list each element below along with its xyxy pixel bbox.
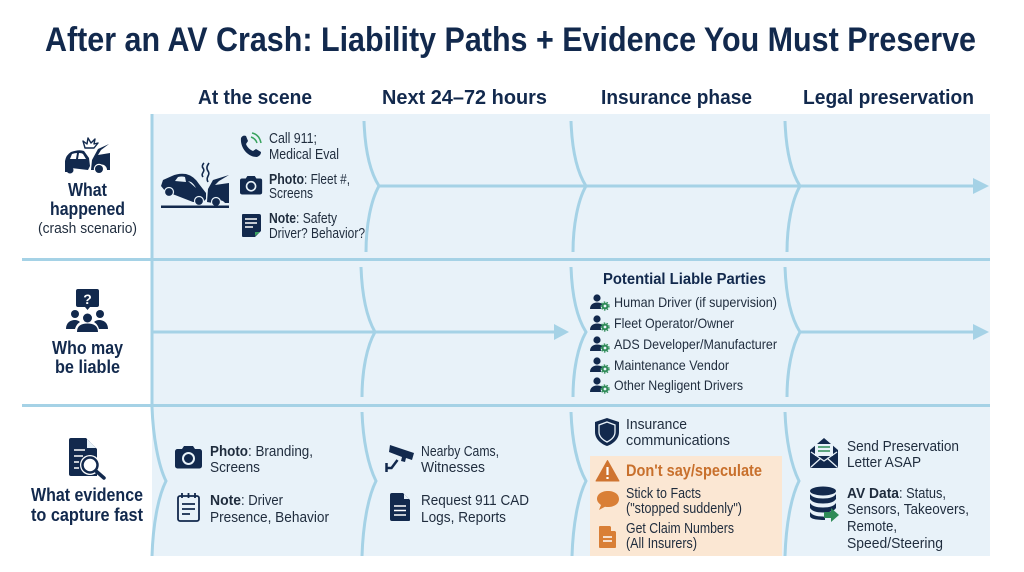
cell: evidence at the scene <box>175 443 329 526</box>
header: insurance phase: Insurance phase <box>601 86 752 109</box>
send preservation letter item: Letter ASAP <box>847 454 921 471</box>
callout: don't say or speculate <box>590 456 782 556</box>
text: what evidence: What evidence <box>31 485 143 505</box>
header: legal preservation: Legal preservation <box>803 86 974 109</box>
row label: what happened <box>38 138 137 237</box>
get claim numbers item <box>599 521 734 552</box>
text: what happened: What <box>68 180 107 200</box>
av data item: Remote, <box>847 518 897 535</box>
column headers <box>198 86 974 109</box>
heading: Potential Liable Parties <box>603 271 766 288</box>
insurance communications heading: Insurance <box>626 416 687 433</box>
icon: group with question: ? <box>83 291 92 307</box>
stick to facts item <box>597 486 742 517</box>
row label: what happened: (crash scenario) <box>38 220 137 237</box>
call 911 item <box>241 131 339 163</box>
arrowheads <box>554 178 989 340</box>
row label: what happened: happened <box>50 199 125 219</box>
party: other negligent drivers: Other Negligent Drivers <box>614 377 743 393</box>
note safety driver item <box>242 211 365 242</box>
note driver presence item <box>178 492 329 526</box>
panel: potential liable parties <box>590 271 777 393</box>
header: next 24-72 hours: Next 24–72 hours <box>382 86 547 109</box>
nearby cams item: Nearby Cams, <box>421 443 499 460</box>
insurance communications heading: communications <box>626 432 730 449</box>
row label: who may be liable: be liable <box>55 357 120 377</box>
nearby cams item: Witnesses <box>421 459 485 476</box>
av data item: AV Data <box>847 485 900 502</box>
photo branding item: Screens <box>210 459 260 476</box>
photo branding item: Photo <box>210 443 248 460</box>
row label: what evidence to capture fast <box>31 438 143 525</box>
photo fleet item: Screens <box>269 186 313 202</box>
photo fleet item <box>240 172 350 202</box>
note safety driver item: : Safety <box>296 211 338 227</box>
request 911 logs item: Logs, Reports <box>421 509 506 526</box>
icon: warning <box>596 460 619 481</box>
get claim numbers item: (All Insurers) <box>626 536 697 552</box>
photo branding item <box>175 443 313 476</box>
cell: at the scene, what happened <box>161 131 365 242</box>
call 911 item: Medical Eval <box>269 147 339 163</box>
cell: insurance communications <box>590 416 782 556</box>
photo fleet item: : Fleet #, <box>304 172 350 188</box>
callout heading: Don't say/speculate <box>626 461 762 480</box>
cell: legal preservation evidence <box>810 438 969 552</box>
photo branding item: : Branding, <box>248 443 313 460</box>
icon: document with magnifier <box>69 438 104 478</box>
row label: what evidence to capture fast: to capture fast <box>31 505 143 525</box>
request 911 logs item <box>390 492 529 526</box>
icon: car crash scene <box>161 163 229 208</box>
party: maintenance vendor: Maintenance Vendor <box>614 357 729 373</box>
av data item: Speed/Steering <box>847 535 943 552</box>
party: ads developer: ADS Developer/Manufacturer <box>614 336 777 352</box>
grid panel background <box>152 114 990 556</box>
party: human driver: Human Driver (if supervision) <box>614 294 777 310</box>
get claim numbers item: Get Claim Numbers <box>626 521 734 537</box>
av data item <box>810 485 969 552</box>
icon: crash <box>65 138 110 174</box>
nearby cams item <box>386 443 499 476</box>
photo fleet item: Photo <box>269 172 304 188</box>
note safety driver item: Driver? Behavior? <box>269 226 365 242</box>
note driver presence item: Note <box>210 492 241 509</box>
av data item: Sensors, Takeovers, <box>847 501 969 518</box>
stick to facts item: ("stopped suddenly") <box>626 501 742 517</box>
insurance communications heading <box>595 416 730 449</box>
text: who may be liable: Who may <box>52 338 123 358</box>
party: fleet operator: Fleet Operator/Owner <box>614 315 734 331</box>
cell: evidence next 24-72 hours <box>386 443 529 526</box>
note driver presence item: Presence, Behavior <box>210 509 329 526</box>
stick to facts item: Stick to Facts <box>626 486 701 502</box>
call 911 item: Call 911; <box>269 131 317 147</box>
header: at the scene: At the scene <box>198 86 312 109</box>
note safety driver item: Note <box>269 211 296 227</box>
request 911 logs item: Request 911 CAD <box>421 492 529 509</box>
note driver presence item: : Driver <box>241 492 283 509</box>
send preservation letter item: Send Preservation <box>847 438 959 455</box>
swimlane grid lines and arrows <box>22 114 990 556</box>
row label: who may be liable <box>52 289 123 377</box>
av data item: : Status, <box>899 485 946 502</box>
send preservation letter item <box>810 438 959 471</box>
